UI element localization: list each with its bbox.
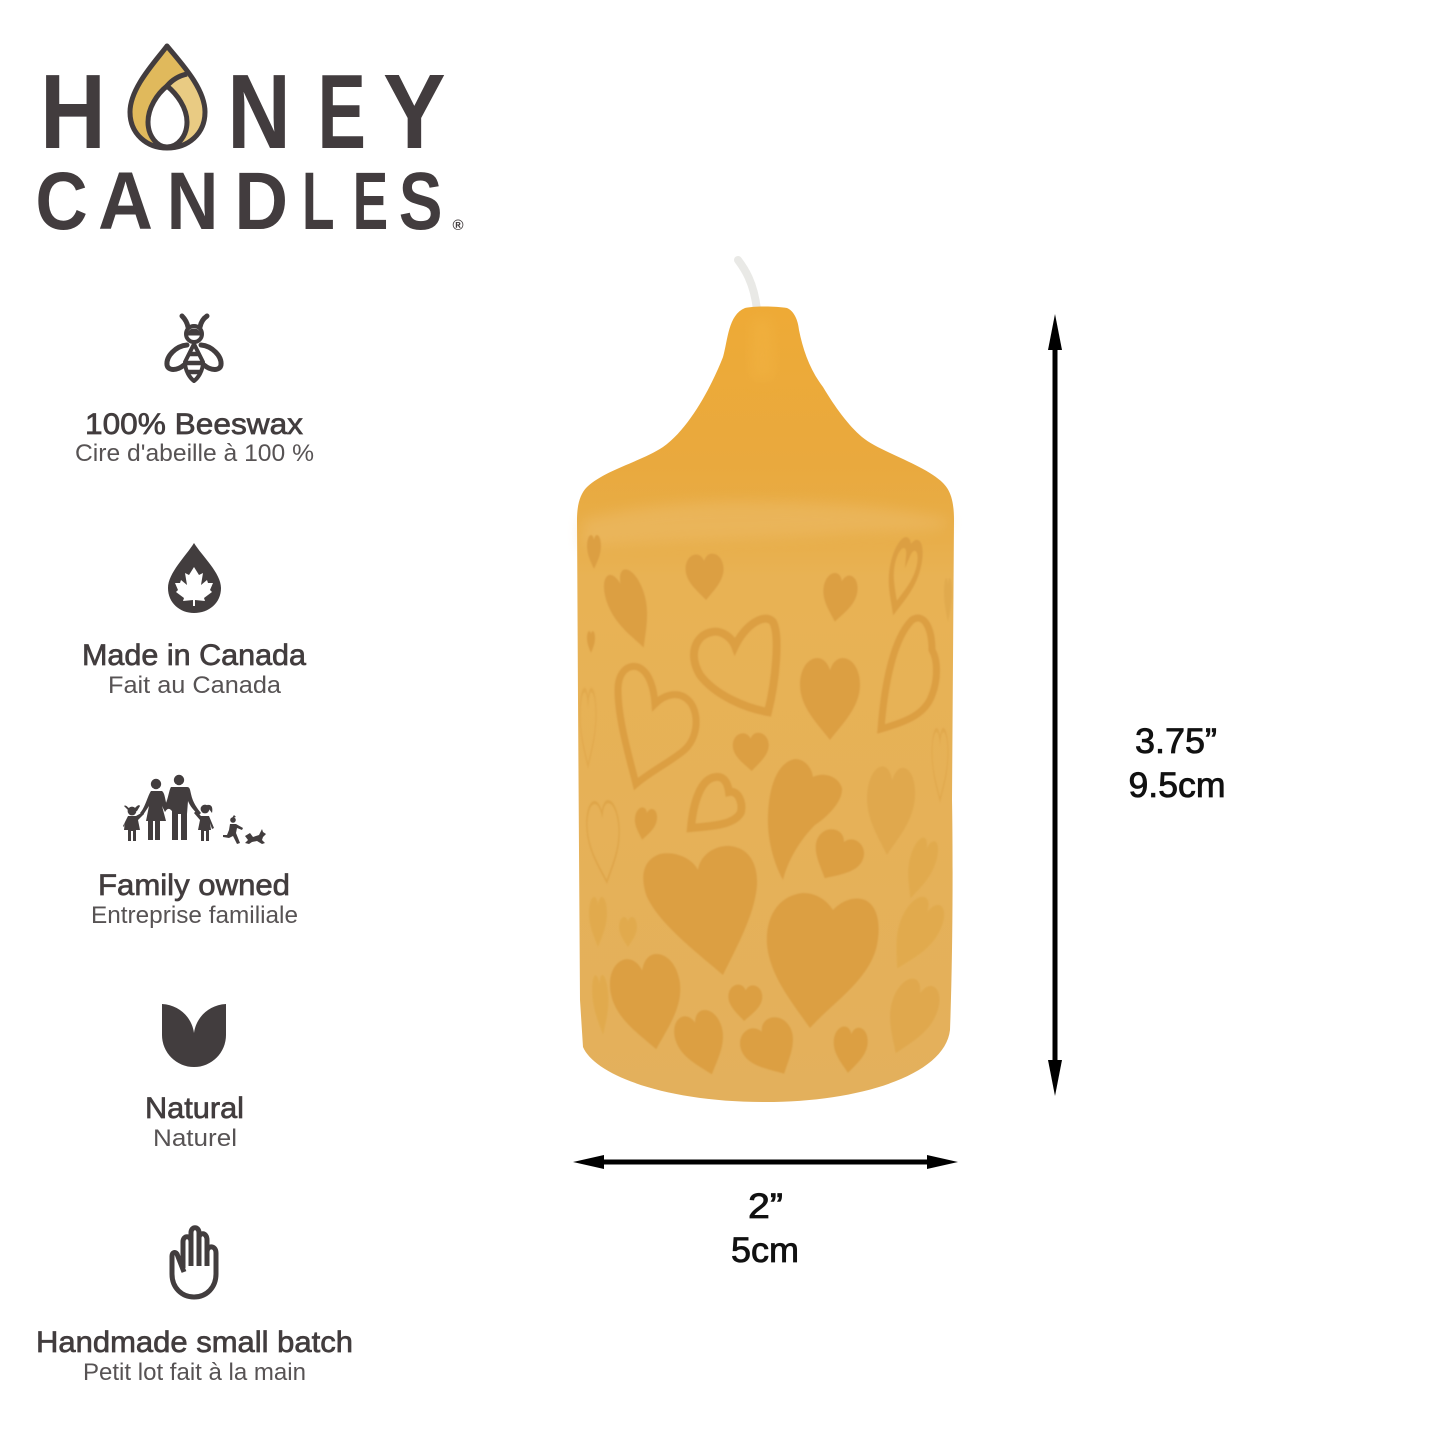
logo word: CANDLES: A [98, 154, 153, 247]
label: width: 2” [748, 1187, 783, 1226]
logo word: HONEY: Y [383, 53, 446, 171]
icon: family [123, 775, 266, 844]
logo word: CANDLES [35, 154, 464, 247]
icon: drop with maple leaf [168, 543, 221, 613]
label: width [731, 1187, 799, 1270]
heading: 100% Beeswax: 100% Beeswax [85, 408, 303, 441]
icon: bee [167, 316, 221, 381]
heading: Handmade small batch: Handmade small batch [36, 1326, 353, 1359]
logo word: CANDLES: L [302, 154, 335, 247]
candle wick [738, 260, 757, 310]
heading: Made in Canada: Made in Canada [82, 639, 306, 672]
feature: Handmade small batch [36, 1228, 353, 1386]
arrow: height [1048, 314, 1062, 1096]
label: height: 9.5cm [1128, 766, 1226, 805]
logo word: HONEY: E [318, 53, 366, 171]
label: width: 5cm [731, 1231, 799, 1270]
feature: Natural [145, 1004, 244, 1152]
subheading: Entreprise familiale: Entreprise familiale [91, 902, 298, 929]
feature: 100% Beeswax [75, 316, 314, 467]
logo word: HONEY [40, 52, 446, 171]
candle outlined hearts [580, 541, 948, 883]
logo icon: flame drop [130, 46, 205, 148]
icon: leaf [162, 1004, 226, 1067]
subheading: Petit lot fait à la main: Petit lot fait à la main [83, 1359, 306, 1386]
candle embossed hearts [587, 535, 952, 1086]
icon: hand [172, 1228, 216, 1297]
subheading: Fait au Canada: Fait au Canada [108, 672, 282, 699]
logo word: CANDLES: ® [452, 217, 464, 234]
feature: Made in Canada [82, 543, 306, 699]
subheading: Cire d'abeille: Cire d'abeille à 100 % [75, 440, 314, 467]
subheading: Naturel: Naturel [153, 1125, 237, 1152]
logo word: HONEY: N [227, 52, 291, 171]
heading: Family owned: Family owned [98, 869, 290, 902]
logo word: CANDLES: D [234, 155, 288, 247]
candle rim highlight [582, 502, 950, 548]
label: height: 3.75” [1135, 722, 1217, 761]
candle body [577, 306, 954, 1102]
logo word: CANDLES: C [35, 156, 88, 247]
heading: Natural: Natural [145, 1092, 244, 1125]
candle tip highlight [750, 317, 775, 380]
logo word: CANDLES: E [353, 155, 388, 247]
logo word: HONEY: H [40, 53, 106, 171]
logo word: CANDLES: S [399, 155, 442, 247]
candle photo [577, 260, 954, 1102]
logo word: CANDLES: N [167, 156, 218, 247]
label: height [1128, 722, 1226, 805]
logo: Honey Candles [35, 46, 464, 247]
feature: Family owned [91, 775, 298, 929]
arrow: width [573, 1155, 958, 1169]
